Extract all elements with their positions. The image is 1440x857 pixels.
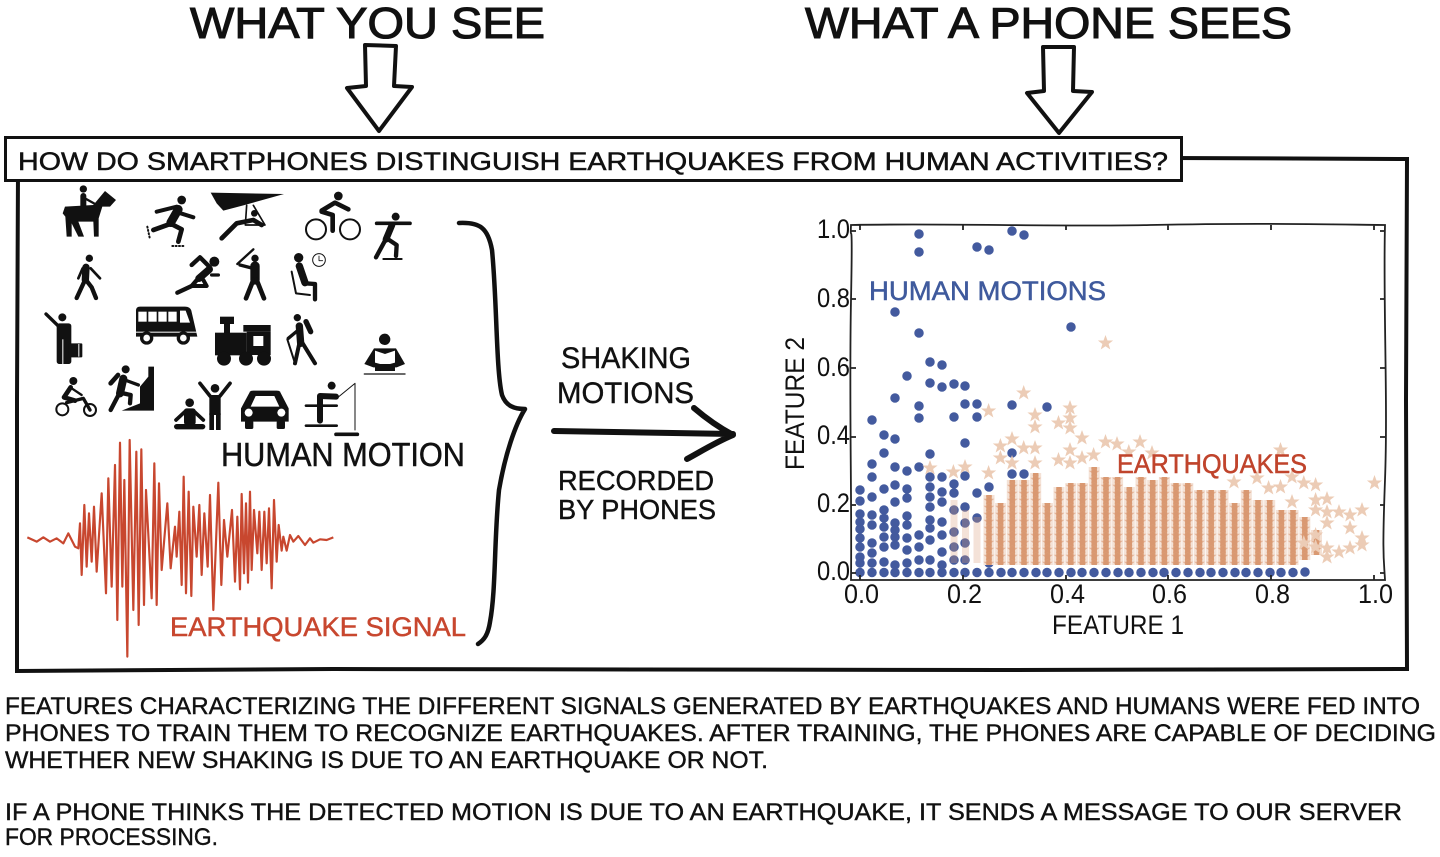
x axis tick labels <box>844 579 1393 609</box>
x axis tick labels: 0.2 <box>947 579 982 609</box>
icon: rock climber <box>111 365 154 411</box>
x axis tick labels: 0.8 <box>1255 579 1290 609</box>
explanatory text: training: PHONES TO TRAIN THEM TO RECOGNIZE EARTHQUAKES. AFTER TRAINING, THE PHONES ARE CAPABLE OF DECIDING <box>5 720 1436 747</box>
heading: what you see: WHAT YOU SEE <box>190 0 545 48</box>
heading: what a phone sees: WHAT A PHONE SEES <box>805 0 1292 48</box>
arrow: to phone view <box>554 408 733 459</box>
icon: skateboarder <box>376 213 410 259</box>
icon: seated person with clock <box>292 253 325 299</box>
label: recorded by phones: RECORDED <box>558 465 714 496</box>
icon: traveller with suitcase <box>46 313 82 365</box>
earthquake waveform <box>27 440 333 657</box>
x axis tick labels: 1.0 <box>1358 579 1393 609</box>
icon: fisherman <box>306 382 357 434</box>
explanatory text: training <box>5 693 1436 774</box>
y axis tick labels <box>817 214 850 586</box>
y axis tick labels: 0.6 <box>817 352 850 382</box>
x axis tick labels: 0.4 <box>1050 579 1085 609</box>
icon: sprinter <box>177 257 219 293</box>
panel title box: HOW DO SMARTPHONES DISTINGUISH EARTHQUAKES FROM HUMAN ACTIVITIES? <box>18 148 1168 176</box>
panel title box <box>6 138 1182 180</box>
label: shaking motions: SHAKING <box>561 342 691 375</box>
icon: hang glider <box>211 193 284 238</box>
icon: walker <box>77 255 100 298</box>
icon: motorbike rider <box>56 377 96 416</box>
plot frame and ticks <box>850 224 1386 580</box>
label: recorded by phones <box>558 465 716 525</box>
label: human motions: HUMAN MOTIONS <box>869 276 1106 306</box>
icon: bus <box>136 307 198 345</box>
arrow: what you see down to panel <box>347 45 412 131</box>
label: earthquakes: EARTHQUAKES <box>1117 449 1307 479</box>
y axis tick labels: 0.4 <box>817 420 850 450</box>
label: recorded by phones: BY PHONES <box>558 494 716 525</box>
icon: car <box>241 391 289 429</box>
arrow: what a phone sees down to panel <box>1027 47 1092 133</box>
scatter chart <box>780 214 1393 640</box>
label: shaking motions: MOTIONS <box>557 377 694 410</box>
human activity icons <box>46 185 410 434</box>
y axis title: FEATURE 2 <box>780 337 810 470</box>
main panel frame <box>17 158 1407 671</box>
label: shaking motions <box>557 342 694 410</box>
x axis tick labels: 0.6 <box>1152 579 1187 609</box>
blue points: human motions <box>860 231 1305 572</box>
y axis tick labels: 1.0 <box>817 214 850 244</box>
icon: batter <box>237 249 264 298</box>
y axis tick labels: 0.8 <box>817 283 850 313</box>
explanatory text: training: WHETHER NEW SHAKING IS DUE TO AN EARTHQUAKE OR NOT. <box>5 747 768 774</box>
label: earthquake signal: EARTHQUAKE SIGNAL <box>170 612 466 642</box>
y axis tick labels: 0.0 <box>817 556 850 586</box>
label: human motion: HUMAN MOTION <box>221 436 465 473</box>
icon: person with raised arms <box>200 383 230 430</box>
icon: cyclist <box>306 192 360 239</box>
icon: meditating person <box>176 398 203 427</box>
explanatory text: training: FEATURES CHARACTERIZING THE DIFFERENT SIGNALS GENERATED BY EARTHQUAKES AND HUMANS WERE FED INTO <box>5 693 1420 720</box>
star points: earthquakes <box>922 335 1382 565</box>
icon: hiker <box>287 314 315 363</box>
icon: horse rider <box>63 185 116 237</box>
x axis tick labels: 0.0 <box>844 579 879 609</box>
explanatory text: server message: IF A PHONE THINKS THE DETECTED MOTION IS DUE TO AN EARTHQUAKE, IT SENDS A MESSAGE TO OUR SERVER <box>5 799 1402 826</box>
curly brace <box>459 223 525 644</box>
icon: train <box>215 317 271 366</box>
explanatory text: server message: FOR PROCESSING. <box>5 824 218 851</box>
icon: roller skater <box>147 196 193 246</box>
explanatory text: server message <box>5 799 1402 851</box>
x axis title: FEATURE 1 <box>1052 610 1184 640</box>
icon: person reading <box>364 334 405 374</box>
y axis tick labels: 0.2 <box>817 488 850 518</box>
